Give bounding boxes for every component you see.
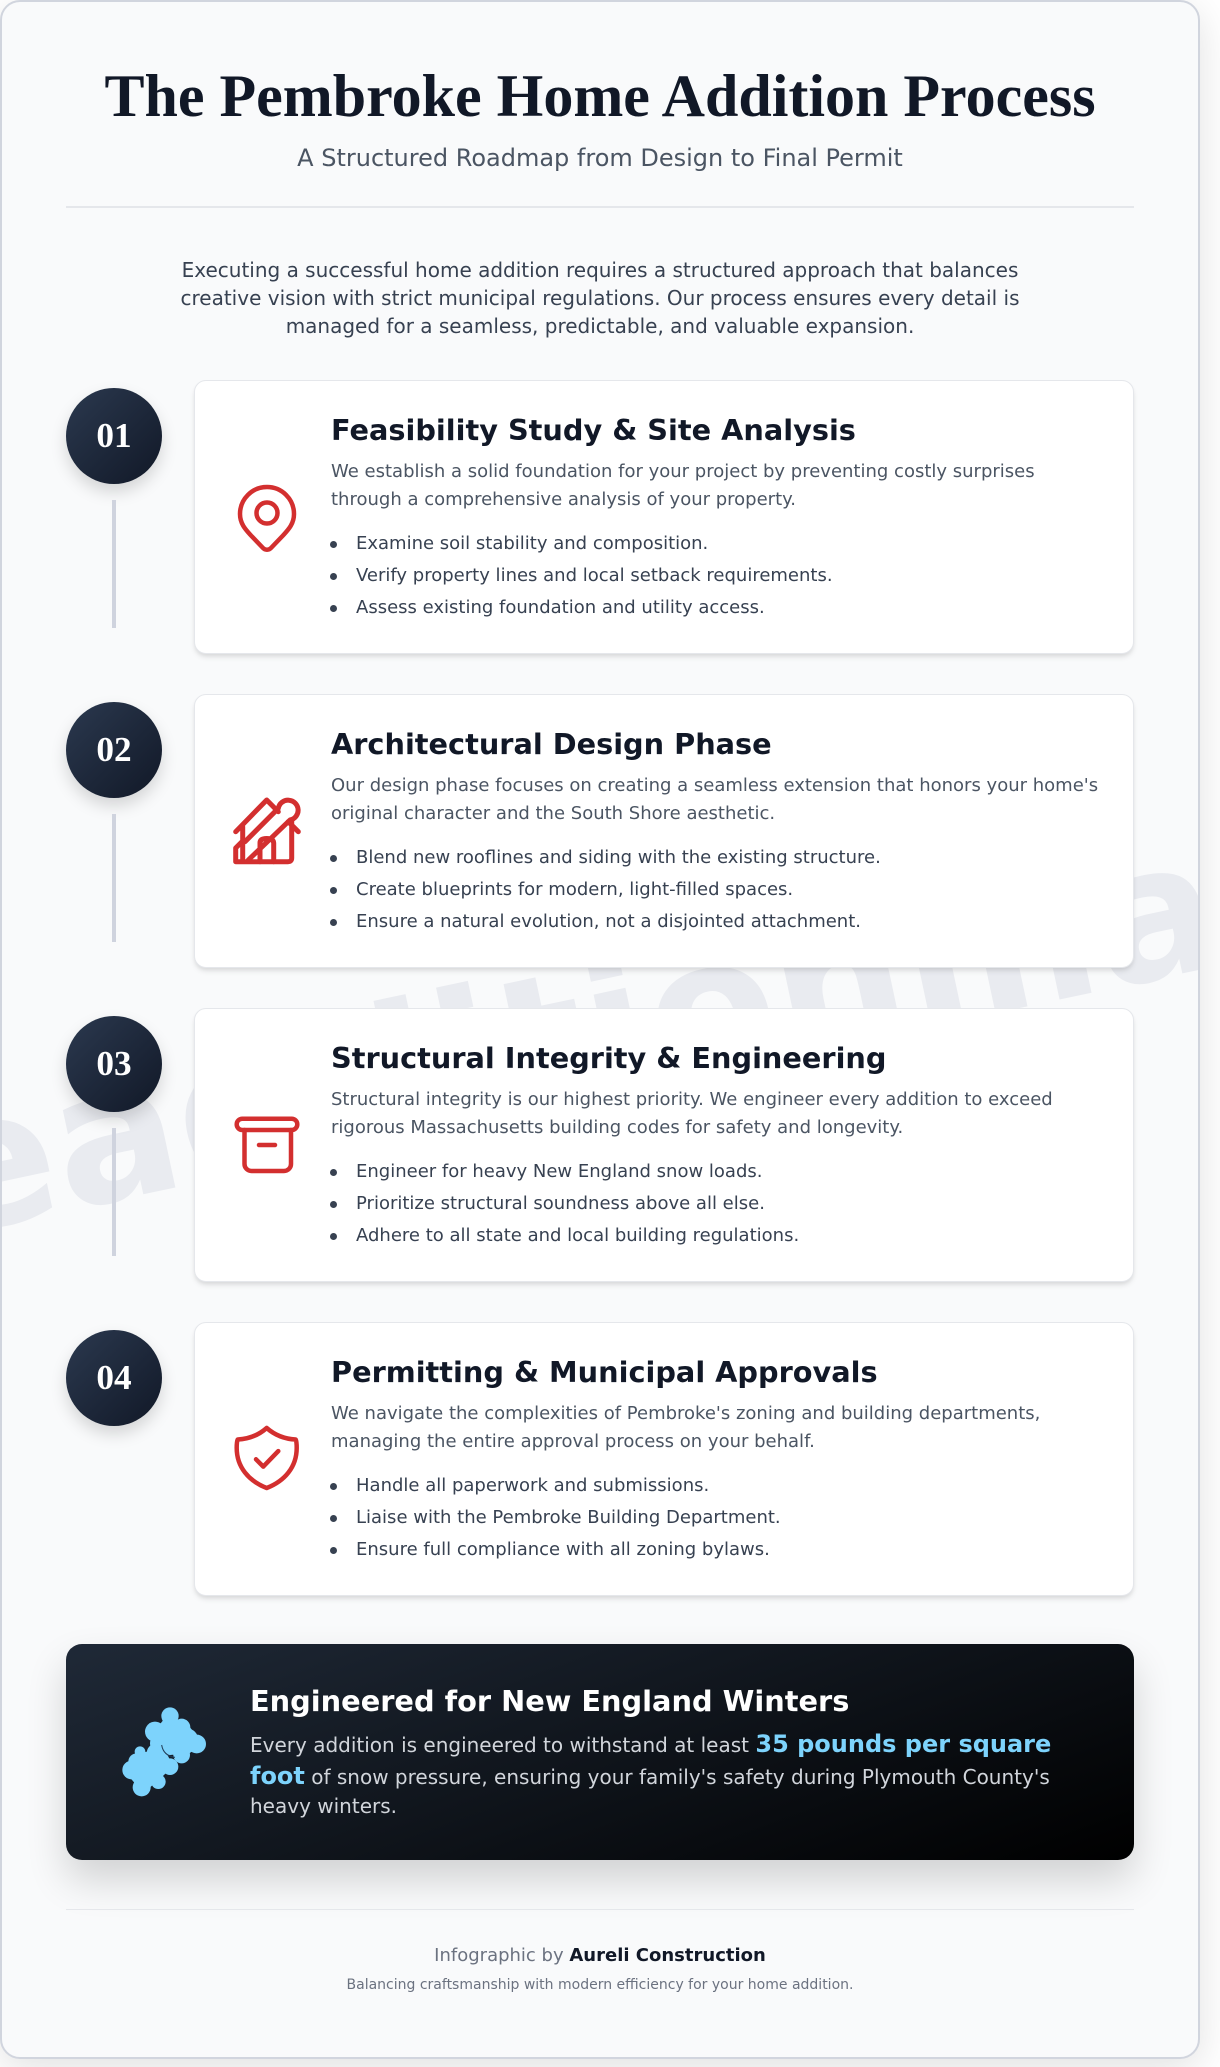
step 03 description: [331, 1089, 1053, 1138]
step 02 number: 02: [96, 730, 132, 769]
step 01 connector: [112, 500, 116, 628]
step 01 bullet list: Verify property lines and local setback requirements.: [356, 565, 833, 586]
step 04 bullet list: Handle all paperwork and submissions.: [356, 1475, 709, 1496]
intro paragraph: Executing a successful home addition requires a structured approach that balances: [182, 258, 1018, 282]
panel: step 04 card: [194, 1322, 1134, 1596]
step 02 connector: [112, 814, 116, 942]
step 02 description: original character and the South Shore aesthetic.: [331, 803, 775, 824]
icon: snowflake: [122, 1707, 206, 1796]
callout body: heavy winters.: [250, 1794, 397, 1818]
footer tagline: Balancing craftsmanship with modern efficiency for your home addition.: [347, 1977, 853, 1993]
step 03 description: rigorous Massachusetts building codes for safety and longevity.: [331, 1117, 903, 1138]
step 03 number: [66, 1016, 162, 1112]
step 02 bullet list: Blend new rooflines and siding with the existing structure.: [356, 847, 881, 868]
step 03 bullet list: Prioritize structural soundness above all else.: [356, 1193, 765, 1214]
step 02 bullet list: Ensure a natural evolution, not a disjointed attachment.: [356, 911, 861, 932]
step 04 bullet list: [330, 1475, 781, 1560]
step 03 bullet list: Adhere to all state and local building regulations.: [356, 1225, 799, 1246]
step 04 description: managing the entire approval process on your behalf.: [331, 1431, 815, 1452]
callout body: Every addition is engineered to withstand at least 35 pounds per square: [250, 1730, 1051, 1758]
panel: step 03 card: [194, 1008, 1134, 1282]
footer divider: [66, 1909, 1134, 1910]
step 02 description: [331, 775, 1098, 824]
callout heading: Engineered for New England Winters: [250, 1684, 849, 1718]
step 04 number: 04: [96, 1358, 132, 1397]
step 03 description: Structural integrity is our highest priority. We engineer every addition to exceed: [331, 1089, 1053, 1110]
panel: winter callout: [66, 1644, 1134, 1860]
step 03 number: 03: [96, 1044, 132, 1083]
icon: archive box: [237, 1119, 297, 1171]
footer credit: Infographic by Aureli Construction: [434, 1945, 766, 1966]
callout body: foot of snow pressure, ensuring your family's safety during Plymouth County's: [250, 1762, 1050, 1790]
step 03 bullet list: Engineer for heavy New England snow loads.: [356, 1161, 762, 1182]
icon: location pin: [240, 487, 294, 550]
step 04 number: [66, 1330, 162, 1426]
step 01 bullet list: [330, 533, 833, 618]
step 01 bullet list: Examine soil stability and composition.: [356, 533, 708, 554]
step 02 bullet list: Create blueprints for modern, light-filled spaces.: [356, 879, 793, 900]
step 03 bullet list: [330, 1161, 799, 1246]
subtitle: A Structured Roadmap from Design to Final Permit: [297, 144, 903, 172]
step 01 description: through a comprehensive analysis of your property.: [331, 489, 796, 510]
step 04 description: We navigate the complexities of Pembroke's zoning and building departments,: [331, 1403, 1040, 1424]
icon: shield check: [237, 1428, 297, 1488]
intro paragraph: [180, 258, 1019, 338]
step 03 connector: [112, 1128, 116, 1256]
header divider: [66, 206, 1134, 208]
step 03 heading: Structural Integrity & Engineering: [331, 1041, 886, 1075]
step 01 description: We establish a solid foundation for your project by preventing costly surprises: [331, 461, 1035, 482]
step 01 description: [331, 461, 1035, 510]
step 04 bullet list: Ensure full compliance with all zoning bylaws.: [356, 1539, 770, 1560]
step 02 description: Our design phase focuses on creating a seamless extension that honors your home's: [331, 775, 1098, 796]
step 02 bullet list: [330, 847, 881, 932]
step 04 heading: Permitting & Municipal Approvals: [331, 1355, 878, 1389]
step 04 description: [331, 1403, 1040, 1452]
panel: step 02 card: [194, 694, 1134, 968]
step 01 bullet list: Assess existing foundation and utility access.: [356, 597, 765, 618]
step 02 number: [66, 702, 162, 798]
intro paragraph: creative vision with strict municipal regulations. Our process ensures every detail is: [180, 286, 1019, 310]
intro paragraph: managed for a seamless, predictable, and valuable expansion.: [286, 314, 914, 338]
panel: step 01 card: [194, 380, 1134, 654]
step 01 heading: Feasibility Study & Site Analysis: [331, 413, 856, 447]
step 01 number: [66, 388, 162, 484]
callout body: [250, 1730, 1051, 1818]
icon: house with pencil: [236, 800, 298, 862]
step 02 heading: Architectural Design Phase: [331, 727, 772, 761]
step 04 bullet list: Liaise with the Pembroke Building Department.: [356, 1507, 781, 1528]
title: The Pembroke Home Addition Process: [104, 63, 1096, 129]
step 01 number: 01: [96, 416, 132, 455]
